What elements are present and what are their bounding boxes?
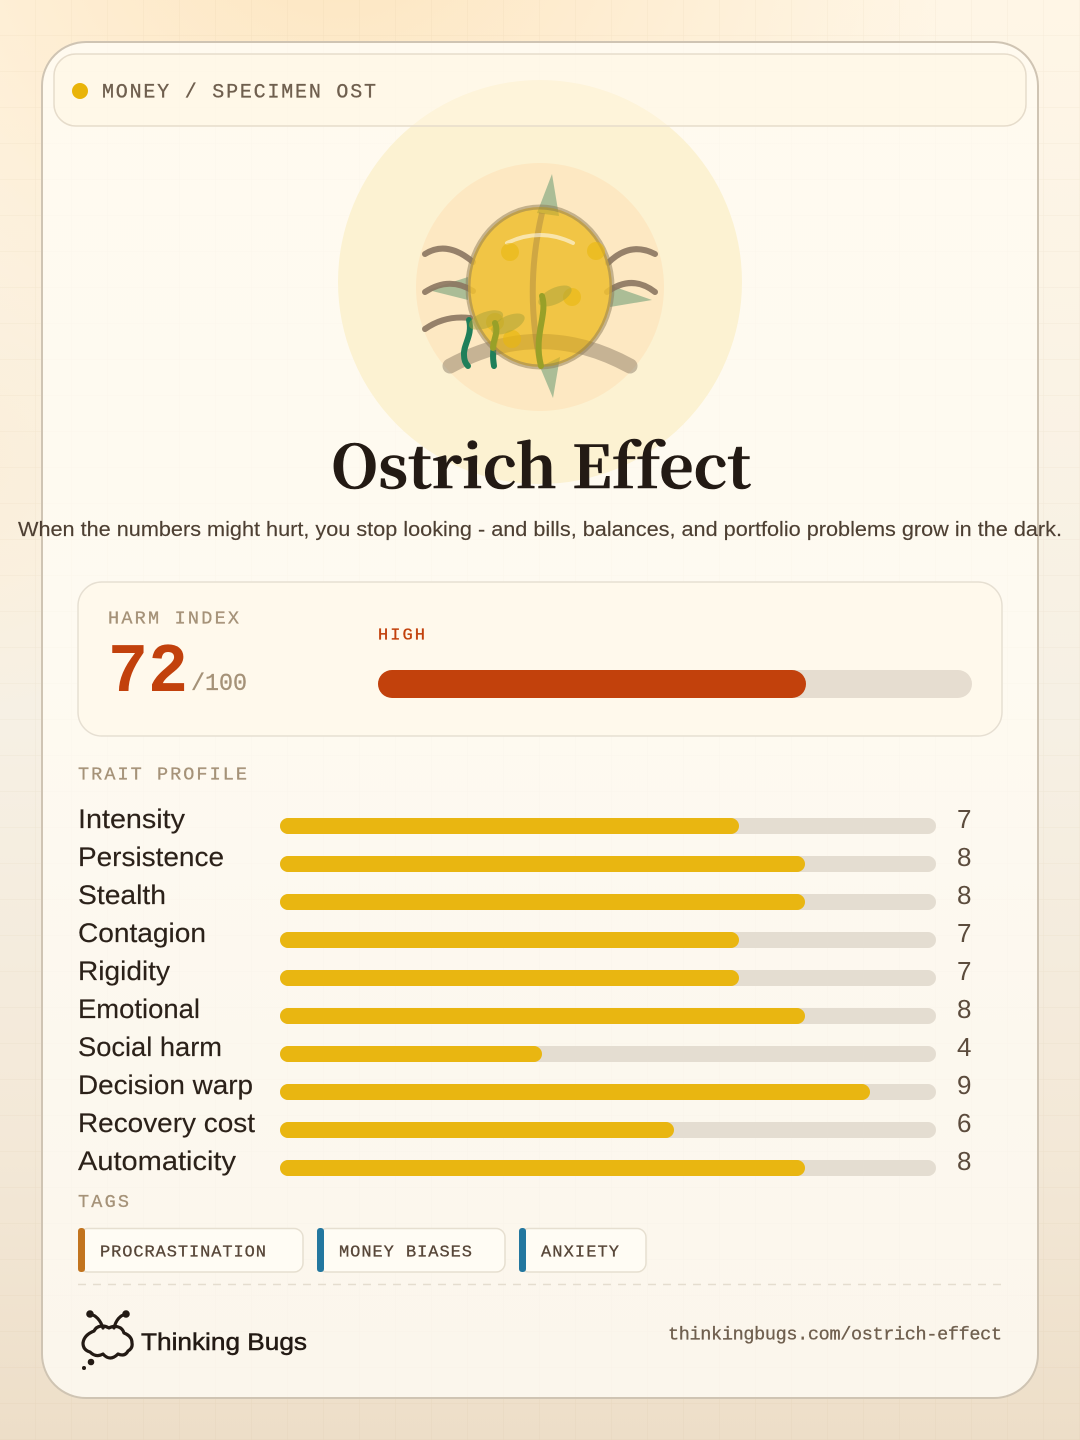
- title: Ostrich Effect: [331, 420, 751, 505]
- chart: trait bars: Decision warp: [78, 1070, 253, 1100]
- chart: trait bars: Social harm: [78, 1032, 222, 1062]
- subtitle: When the numbers might hurt, you stop looking - and bills, balances, and portfolio problems grow in the dark.: [18, 518, 1062, 541]
- tag: anxiety: ANXIETY: [541, 1244, 619, 1262]
- panel: harm index: [78, 582, 1002, 736]
- logo: thinking bugs: [82, 1310, 307, 1370]
- url: thinkingbugs.com/ostrich-effect: [668, 1324, 1002, 1346]
- severity label: HIGH: [378, 626, 425, 646]
- chart: trait bars: 7: [957, 804, 971, 834]
- tag: anxiety: [519, 1228, 646, 1272]
- harm score: [108, 634, 247, 713]
- chart: trait bars: Intensity: [78, 804, 186, 834]
- harm meter: [378, 670, 972, 698]
- chart: trait bars: 8: [957, 994, 971, 1024]
- chart: trait bars: 8: [957, 1146, 971, 1176]
- header label: MONEY / SPECIMEN OST: [102, 82, 376, 104]
- heading: trait profile: TRAIT PROFILE: [78, 764, 247, 786]
- chart: trait bars: Emotional: [78, 994, 200, 1024]
- chart: trait bars: Automaticity: [78, 1146, 237, 1176]
- header bar: [54, 54, 1026, 126]
- chart: trait bars: Rigidity: [78, 956, 171, 986]
- illustration: ostrich bug: [416, 163, 664, 411]
- chart: trait bars: 6: [957, 1108, 971, 1138]
- chart: trait bars: 4: [957, 1032, 971, 1062]
- icon: halo circle: [338, 80, 742, 484]
- tag: procrastination: PROCRASTINATION: [100, 1244, 266, 1262]
- tag: money biases: MONEY BIASES: [339, 1244, 472, 1262]
- icon: cloud bug: [82, 1310, 132, 1370]
- chart: trait bars: 8: [957, 842, 971, 872]
- harm score: /100: [191, 671, 247, 698]
- chart: trait bars: [78, 804, 971, 1176]
- harm score: 72: [108, 634, 188, 713]
- tag: money biases: [317, 1228, 505, 1272]
- chart: trait bars: Recovery cost: [78, 1108, 256, 1138]
- tag: procrastination: [78, 1228, 303, 1272]
- heading: tags: TAGS: [78, 1192, 129, 1213]
- chart: trait bars: 9: [957, 1070, 971, 1100]
- icon: category dot: [72, 83, 88, 99]
- harm index label: HARM INDEX: [108, 608, 239, 630]
- chart: trait bars: Contagion: [78, 918, 206, 948]
- chart: trait bars: Stealth: [78, 880, 166, 910]
- chart: trait bars: 8: [957, 880, 971, 910]
- brand name: Thinking Bugs: [141, 1329, 307, 1356]
- chart: trait bars: Persistence: [78, 842, 224, 872]
- chart: trait bars: 7: [957, 918, 971, 948]
- chart: trait bars: 7: [957, 956, 971, 986]
